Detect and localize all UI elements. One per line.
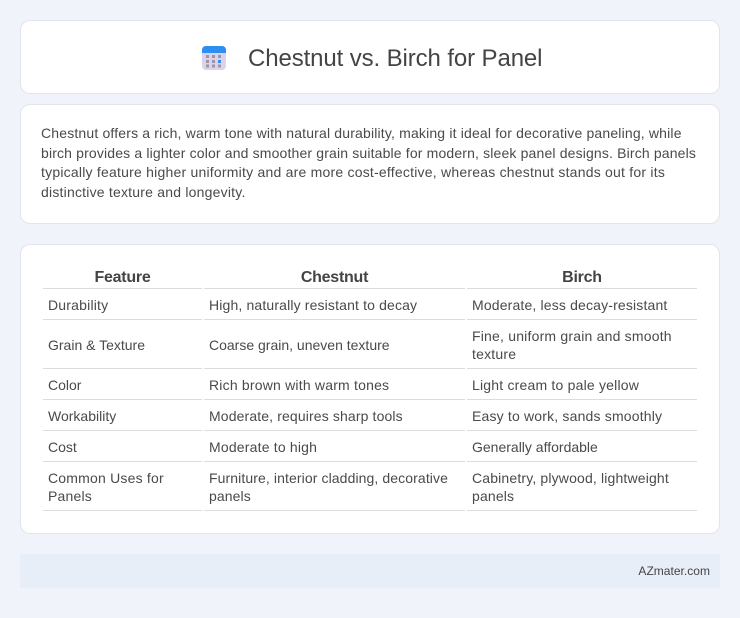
summary text: distinctive texture and longevity. [41,184,246,200]
table header: Birch: Birch [562,269,602,286]
text: Fine, uniform grain and smooth [472,328,672,344]
text: Generally affordable [472,439,598,455]
text: Cabinetry, plywood, lightweight [472,470,669,486]
row: Common Uses for Panels: Panels [48,488,92,504]
text: panels [209,488,251,504]
text: Easy to work, sands smoothly [472,408,662,424]
row: Color: Color [48,377,81,393]
text: Coarse grain, uneven texture [209,337,390,353]
panel: comparison table card [20,244,720,534]
row: Common Uses for Panels [48,470,164,504]
comparison table [43,268,697,512]
title: Chestnut vs. Birch for Panel [248,45,542,72]
panel: summary card [20,104,720,224]
text: Rich brown with warm tones [209,377,389,393]
text: Furniture, interior cladding, decorative [209,470,448,486]
text: panels [472,488,514,504]
panel: title card [20,20,720,94]
table header: Feature: Feature [94,269,151,286]
summary text: birch provides a lighter color and smoother grain suitable for modern, sleek panel designs. Birch panels [41,145,696,161]
text: texture [472,346,516,362]
text: High, naturally resistant to decay [209,297,417,313]
table header: Chestnut: Chestnut [301,269,368,286]
text: Moderate to high [209,439,317,455]
summary text [41,125,696,200]
row: Common Uses for Panels: Common Uses for [48,470,164,486]
footer credit: AZmater.com [638,564,710,578]
row: Cost: Cost [48,439,77,455]
row: Grain and Texture: Grain & Texture [48,337,145,353]
text: Light cream to pale yellow [472,377,639,393]
text: Moderate, requires sharp tools [209,408,403,424]
row: Workability: Workability [48,408,116,424]
row: Durability: Durability [48,297,108,313]
footer bar [20,554,720,588]
icon: calendar [202,46,226,70]
summary text: typically feature higher uniformity and are more cost-effective, whereas chestnut stands out for its [41,164,665,180]
summary text: Chestnut offers a rich, warm tone with natural durability, making it ideal for decorative paneling, while [41,125,682,141]
text: Moderate, less decay-resistant [472,297,667,313]
